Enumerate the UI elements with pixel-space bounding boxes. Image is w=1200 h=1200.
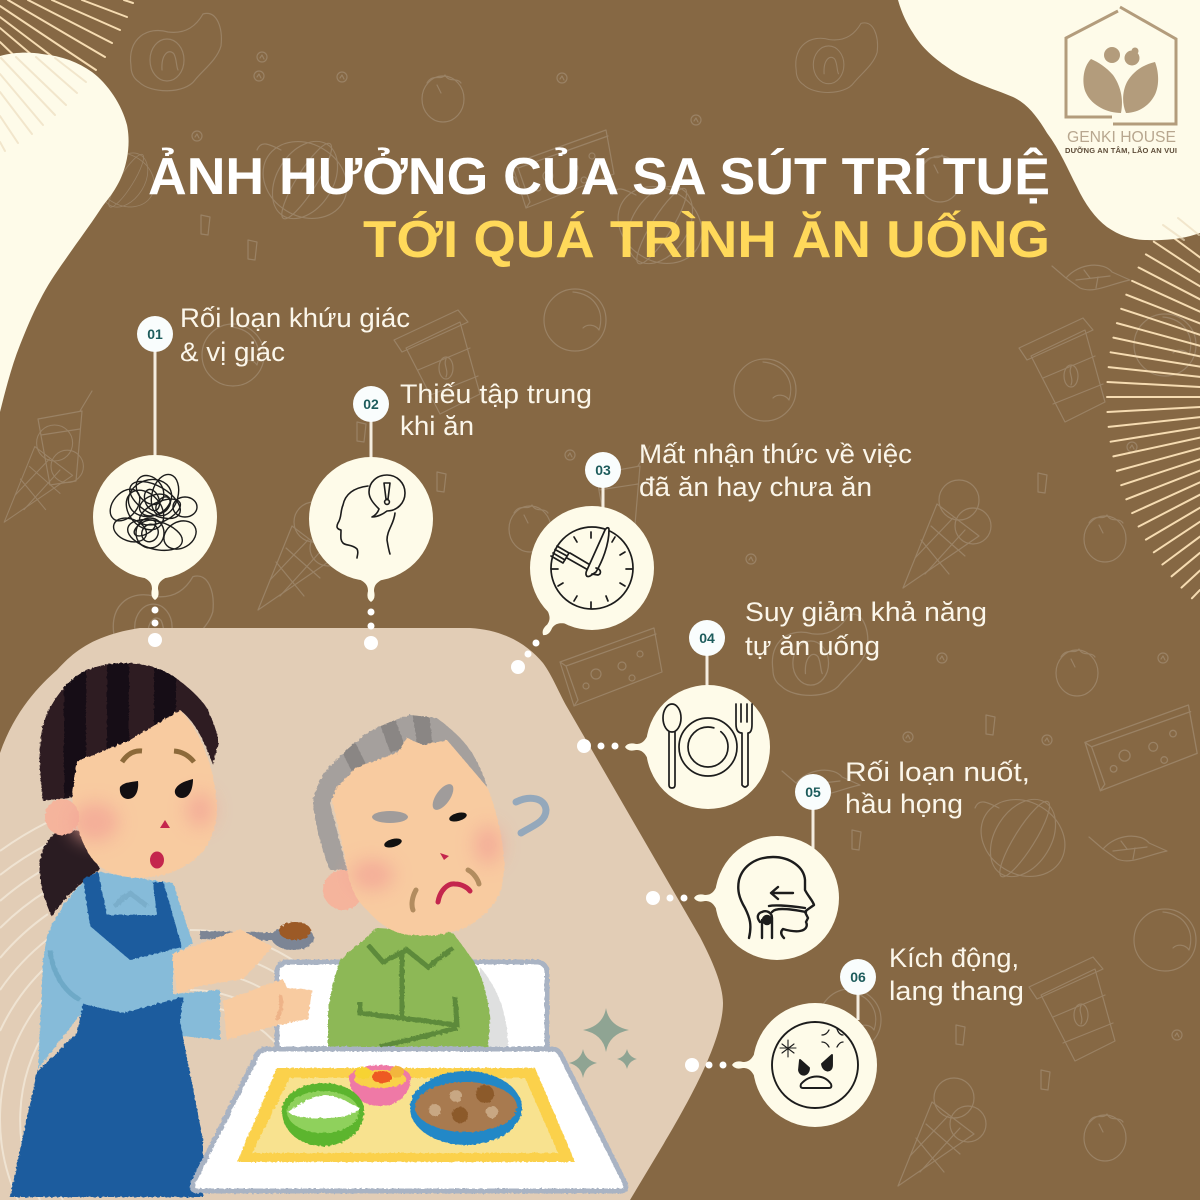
- illustration: caregiver feeding elderly man: [10, 655, 637, 1197]
- badge 05: [795, 774, 831, 810]
- label 04: Suy giảm khả năng: [745, 597, 987, 627]
- dotted connector 03: [511, 640, 540, 674]
- apron: [10, 872, 203, 1197]
- badge 04: [689, 620, 725, 656]
- badge 06: 06: [850, 969, 866, 985]
- placemat: [237, 1068, 575, 1162]
- badge 03: [585, 452, 621, 488]
- dotted connector 05: [646, 891, 688, 905]
- faint sunburst rays over blobs: [0, 57, 1199, 240]
- label 04: tự ăn uống: [745, 631, 880, 661]
- ear: [45, 799, 79, 835]
- item 03: [511, 439, 912, 674]
- panel: illustration backdrop: [0, 628, 723, 1200]
- label 04: [745, 597, 987, 661]
- face: [72, 710, 217, 878]
- wave lines on panel: [0, 822, 300, 1200]
- logo house outline: [1066, 7, 1176, 124]
- badge 05: 05: [805, 784, 821, 800]
- collar: [114, 893, 147, 906]
- logo tagline: DƯỠNG AN TÂM, LÃO AN VUI: [1065, 146, 1177, 155]
- item 05: [646, 757, 1030, 960]
- title line 2: TỚI QUÁ TRÌNH ĂN UỐNG: [363, 210, 1050, 269]
- title line 1: ẢNH HƯỞNG CỦA SA SÚT TRÍ TUỆ: [148, 147, 1050, 206]
- icon: throat cross-section: [738, 857, 814, 938]
- label 03: Mất nhận thức về việc: [639, 439, 912, 469]
- hair: [40, 663, 218, 801]
- elderly man: [313, 710, 504, 1047]
- shirt: [38, 872, 220, 1069]
- man face features: [372, 781, 479, 910]
- label 05: [845, 757, 1030, 819]
- cream blob top left: [0, 53, 129, 412]
- rice bowl: [282, 1112, 364, 1146]
- label 03: đã ăn hay chưa ăn: [639, 472, 872, 502]
- icon: head with alert bubble: [337, 475, 405, 558]
- dotted connector 01: [148, 606, 162, 647]
- caregiver face features: [120, 751, 194, 868]
- head: [330, 733, 504, 936]
- shirt lines: [360, 945, 457, 1047]
- label 06: [889, 943, 1024, 1006]
- dotted connector 06: [685, 1058, 726, 1072]
- connector lines: [155, 340, 858, 1020]
- label 02: [400, 379, 592, 441]
- badge 02: [353, 386, 389, 422]
- dotted connector 04: [577, 739, 618, 753]
- logo figures: [1083, 47, 1158, 113]
- label 05: Rối loạn nuốt,: [845, 757, 1030, 787]
- sparkles: [569, 1008, 637, 1078]
- circle 04 with tail: [625, 685, 770, 809]
- item 02: [309, 379, 592, 650]
- icon: clock with fork and knife: [551, 527, 633, 609]
- cream blob top right: [898, 0, 1200, 240]
- badge 03: 03: [595, 462, 611, 478]
- icon: tangled scribble: [104, 470, 201, 556]
- title: [148, 147, 1050, 269]
- circle 01 with tail: [93, 455, 217, 600]
- sunburst top left: [0, 0, 133, 115]
- caregiver woman: [10, 655, 220, 1197]
- badge 04: 04: [699, 630, 715, 646]
- circle 06 with tail: [732, 1003, 877, 1127]
- badge 06: [840, 959, 876, 995]
- badge 01: [137, 316, 173, 352]
- food tray: [192, 1049, 626, 1191]
- ponytail: [40, 830, 100, 917]
- label 03: [639, 439, 912, 502]
- dotted connector 02: [364, 608, 378, 650]
- label 05: hầu họng: [845, 789, 963, 819]
- label 06: Kích động,: [889, 943, 1019, 973]
- item 01: [93, 303, 410, 647]
- ear: [323, 870, 363, 910]
- badge 01: 01: [147, 326, 163, 342]
- item 06: [685, 943, 1024, 1127]
- caregiver blush: [71, 792, 214, 842]
- man blush: [350, 825, 502, 891]
- circle 02 with tail: [309, 457, 433, 602]
- item 04: [577, 597, 987, 809]
- sunburst right: [1107, 230, 1200, 598]
- icon: angry face: [772, 1022, 858, 1108]
- logo name: GENKI HOUSE: [1067, 129, 1176, 146]
- label 06: lang thang: [889, 976, 1024, 1006]
- icon: plate, spoon and fork: [663, 704, 752, 788]
- shirt: [328, 928, 490, 1047]
- label 01: & vị giác: [180, 337, 285, 367]
- hair highlights: [75, 655, 165, 800]
- badge 02: 02: [363, 396, 379, 412]
- hair: [313, 715, 487, 870]
- circle 03 with tail: [527, 506, 654, 647]
- label 01: Rối loạn khứu giác: [180, 303, 410, 333]
- label 02: khi ăn: [400, 411, 474, 441]
- question squiggle: [516, 798, 546, 833]
- pink bowl: [349, 1078, 411, 1106]
- curry bowl: [410, 1071, 522, 1145]
- label 02: Thiếu tập trung: [400, 379, 592, 409]
- wheelchair backrest: [277, 962, 547, 1054]
- label 01: [180, 303, 410, 367]
- circle 05 with tail: [694, 836, 839, 960]
- logo: Genki House: [1065, 7, 1177, 155]
- caregiver arms and spoon: [172, 922, 314, 1040]
